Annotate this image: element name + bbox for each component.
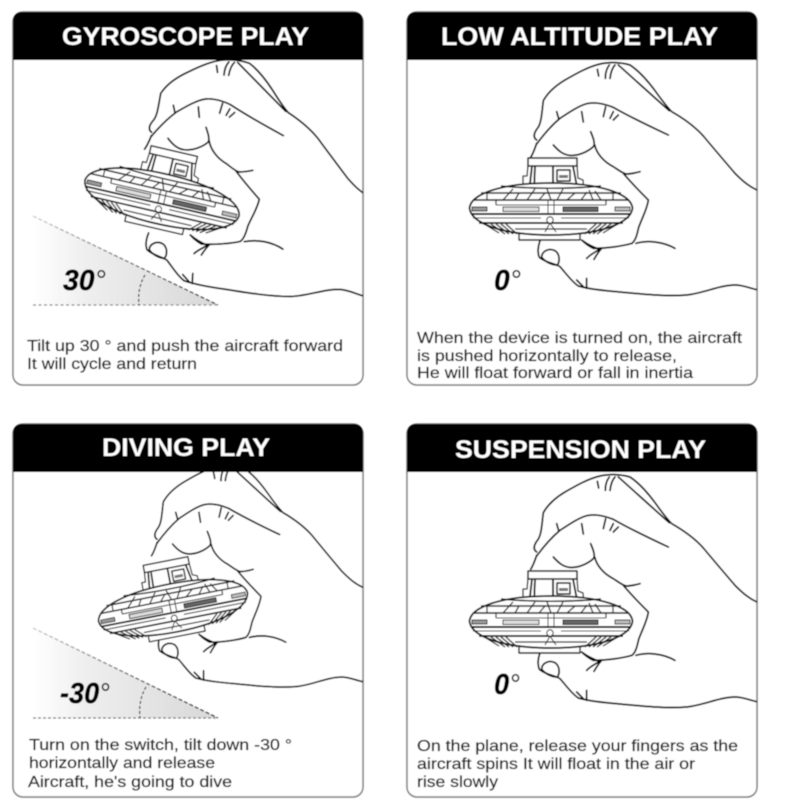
panel: gyroscope play: [13, 12, 378, 385]
text: low altitude instructions: is pushed horizontally to release,: [417, 348, 677, 365]
text: diving instructions: Aircraft, he's going to dive: [28, 774, 232, 791]
text: gyroscope instructions: Tilt up 30 ° and push the aircraft forward: [27, 338, 343, 355]
angle wedge: -30 degrees: [33, 628, 218, 718]
text: low altitude instructions: When the device is turned on, the aircraft: [417, 330, 743, 347]
heading: low altitude play: [407, 12, 757, 60]
heading: suspension play: SUSPENSION PLAY: [455, 436, 706, 464]
text: suspension instructions: aircraft spins It will float in the air or: [417, 756, 696, 773]
illustration: hand holding aircraft: [470, 475, 758, 708]
text: gyroscope instructions: It will cycle and return: [27, 356, 197, 373]
angle wedge: 30 degrees: [33, 216, 218, 305]
panel: suspension play: [407, 424, 758, 797]
text: suspension instructions: rise slowly: [417, 774, 498, 791]
text: diving instructions: horizontally and release: [29, 755, 215, 772]
heading: diving play: DIVING PLAY: [102, 434, 270, 462]
text: diving instructions: [28, 737, 292, 791]
heading: gyroscope play: GYROSCOPE PLAY: [62, 23, 309, 51]
angle label: 0 degrees: 0°: [494, 265, 521, 297]
illustration: hand holding aircraft: [470, 63, 758, 296]
text: gyroscope instructions: [27, 338, 343, 373]
angle label: 0 degrees: 0°: [494, 669, 520, 701]
heading: low altitude play: LOW ALTITUDE PLAY: [441, 23, 718, 51]
heading: diving play: [13, 424, 363, 472]
text: suspension instructions: [417, 738, 738, 791]
illustration: hand holding aircraft: [90, 466, 363, 687]
text: suspension instructions: On the plane, release your fingers as the: [417, 738, 738, 755]
text: diving instructions: Turn on the switch, tilt down -30 °: [29, 737, 292, 754]
text: low altitude instructions: He will float forward or fall in inertia: [417, 365, 693, 382]
heading: suspension play: [407, 424, 757, 472]
angle label: 30 degrees: 30°: [63, 265, 106, 297]
text: low altitude instructions: [417, 330, 743, 382]
panel: low altitude play: [407, 12, 758, 385]
heading: gyroscope play: [13, 12, 363, 60]
angle label: -30 degrees: -30°: [60, 678, 110, 710]
panel: diving play: [13, 424, 363, 797]
ground line: [408, 304, 587, 306]
ground line: [408, 709, 587, 711]
illustration: hand holding aircraft: [78, 55, 378, 301]
